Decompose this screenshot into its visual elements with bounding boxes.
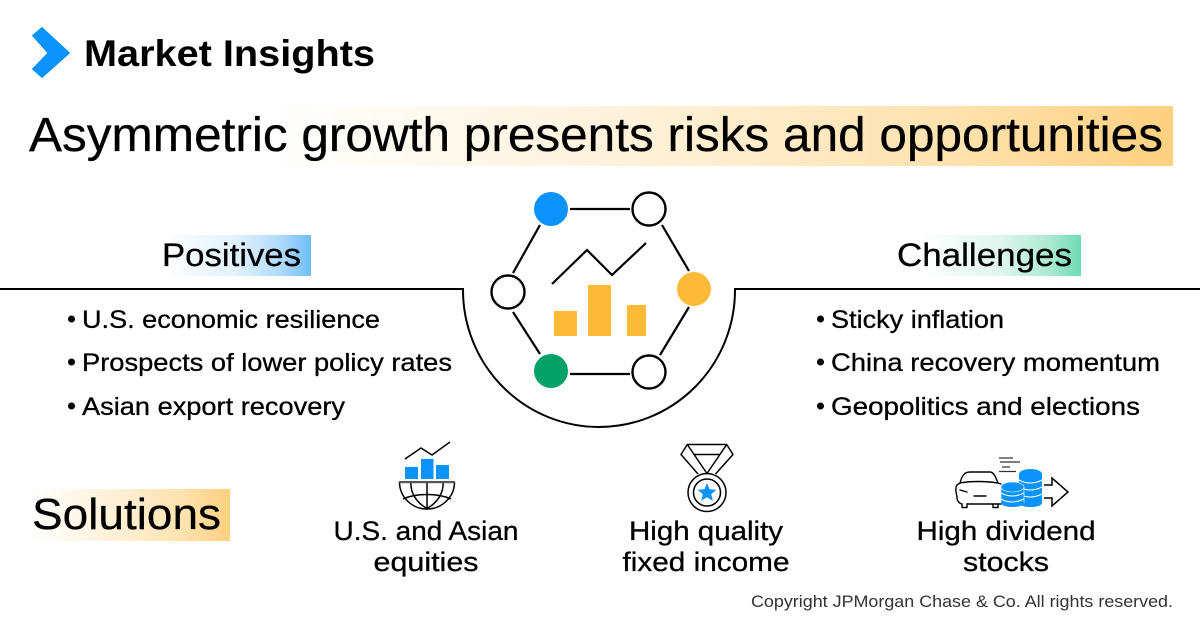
solution label: equities: U.S. and Asian [334,516,518,546]
list: challenges: China recovery momentum [831,349,1160,377]
solution label: equities [334,516,518,577]
list: positives: Prospects of lower policy rates [82,349,452,377]
icon: medal [681,444,733,512]
heading: Solutions: Solutions [32,490,221,539]
title with highlight: Asymmetric growth presents risks and opportunities [29,109,1163,162]
logo: blue chevron [32,28,70,78]
divider with semicircle [0,289,1200,427]
solution label: fixed income: fixed income [622,547,790,577]
network nodes [492,192,711,388]
list: positives: Asian export recovery [82,393,346,421]
solution label: equities: equities [374,547,478,577]
icon: car, coins and arrow [956,458,1068,508]
trend line [552,243,646,284]
central network icon [492,192,711,388]
heading: Challenges: Challenges [897,237,1072,273]
list: challenges: Sticky inflation [831,306,1004,334]
coins [1001,469,1042,507]
solution label: dividend stocks: stocks [963,547,1049,577]
bar chart [554,285,646,336]
speed lines [999,458,1020,472]
list: positives [68,306,452,421]
copyright: Copyright JPMorgan Chase & Co. All rights reserved. [751,592,1173,611]
solution label: dividend stocks [916,516,1096,577]
list: positives: U.S. economic resilience [82,306,380,334]
solution label: fixed income: High quality [629,516,784,546]
icon: globe with bars [399,442,455,509]
heading: Positives: Positives [162,237,301,273]
list: challenges [817,306,1160,421]
car [956,472,1001,508]
list: challenges: Geopolitics and elections [831,393,1140,421]
solution label: fixed income [622,516,790,577]
arrow [1044,478,1068,506]
solution label: dividend stocks: High dividend [916,516,1096,546]
brand heading: Market Insights [84,33,375,74]
network connectors [513,209,689,374]
